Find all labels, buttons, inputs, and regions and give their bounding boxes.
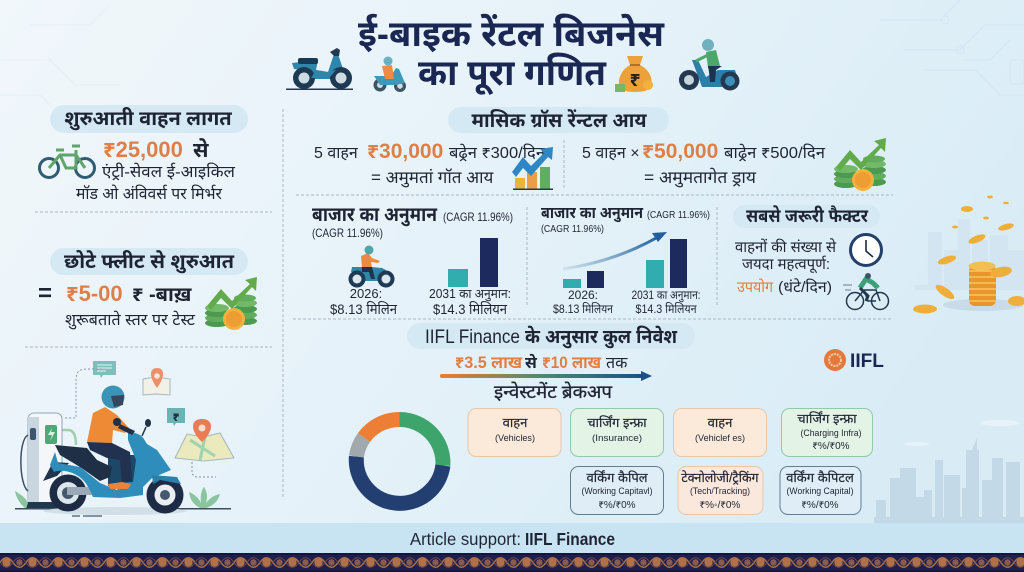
panel: most important factor bbox=[733, 205, 888, 310]
investment range: ₹10 लाख bbox=[542, 353, 602, 372]
heading: market estimate bbox=[541, 205, 710, 235]
labels: $14.3 मिलियन bbox=[636, 301, 697, 316]
footer band: IIFL Finance bbox=[525, 529, 615, 549]
heading: total investment: के अनुसार कुल निवेश bbox=[525, 325, 678, 349]
bar chart bbox=[448, 238, 498, 287]
heading: market estimate bbox=[312, 204, 513, 240]
investment range: तक bbox=[606, 355, 628, 372]
income scenario high: ₹50,000 bbox=[642, 140, 718, 163]
heading: market estimate: (CAGR 11.96%) bbox=[647, 209, 710, 221]
icon: scooter with rider bbox=[679, 39, 740, 90]
investment range: से bbox=[525, 353, 538, 372]
cost description: मॉड ओ अंविवर्स पर मिर्भर bbox=[76, 184, 222, 203]
card: vehicles: (Vehicles) bbox=[495, 433, 535, 444]
card: working capital second: ₹%/₹0% bbox=[801, 500, 839, 511]
labels: $8.13 मिलियन bbox=[553, 301, 613, 316]
panel: total investment bbox=[356, 323, 872, 514]
card: working capital: ₹%/₹0% bbox=[598, 500, 636, 511]
donut chart bbox=[356, 419, 443, 503]
labels: 2031 का अनुमान: bbox=[632, 288, 700, 303]
icon: rider on scooter bbox=[348, 246, 394, 288]
heading: market estimate: (CAGR 11.96%) bbox=[312, 226, 383, 240]
illustration: rider charging an electric scooter bbox=[15, 361, 234, 516]
labels bbox=[553, 288, 700, 316]
card: charging infra bbox=[782, 408, 872, 456]
heading: market estimate: बाजार का अनुमान bbox=[541, 205, 644, 223]
heading: important factor: सबसे जरूरी फैक्टर bbox=[746, 205, 869, 226]
bar chart bbox=[563, 239, 687, 288]
card: technology tracking bbox=[678, 466, 763, 514]
fleet amount: ₹5-00 bbox=[66, 281, 123, 306]
card: working capital: वर्किंग कैपिल bbox=[586, 470, 648, 485]
factor text: वाहनों की संख्या से bbox=[735, 238, 837, 256]
factor text: (धंटे/दिन) bbox=[778, 278, 832, 296]
labels: $8.13 मिलिन bbox=[330, 301, 397, 317]
card: charging insurance: (Insurance) bbox=[592, 433, 642, 444]
cost description: एंट्री-सेवल ई-आइकिल bbox=[102, 162, 236, 181]
icon: money bag bbox=[615, 56, 653, 92]
heading: market estimate: (CAGR 11.96%) bbox=[443, 210, 513, 224]
card: technology tracking: (Tech/Tracking) bbox=[690, 486, 750, 497]
income scenario low: बढ्रेन ₹300/दिन bbox=[449, 143, 546, 162]
flying coins bbox=[913, 196, 1024, 314]
title: का पूरा गणित bbox=[418, 52, 607, 95]
fleet description: शुरूबताते स्तर पर टेस्ट bbox=[65, 310, 196, 330]
card: working capital second: (Working Capital) bbox=[786, 486, 854, 497]
footer band: Article support: bbox=[410, 529, 521, 549]
cost description bbox=[76, 162, 236, 203]
map icons and bubbles: ₹ bbox=[173, 410, 180, 424]
labels: 2031 का अनुमान: bbox=[429, 286, 511, 302]
panel: market estimate right bbox=[541, 205, 710, 316]
scooter body bbox=[50, 430, 181, 498]
card: charging insurance bbox=[570, 408, 664, 456]
heading: market estimate: (CAGR 11.96%) bbox=[541, 223, 604, 235]
icon: parked scooter bbox=[286, 48, 353, 90]
cost amount: ₹25,000 bbox=[103, 137, 183, 162]
card: working capital second: वर्किंग कैपिटल bbox=[786, 470, 854, 485]
rider helmet bbox=[102, 386, 124, 408]
fleet amount: ₹ -बाख़ bbox=[132, 284, 192, 306]
ornamental border bbox=[0, 553, 1024, 572]
card: vehicles: वाहन bbox=[503, 415, 528, 430]
charging station bbox=[21, 413, 76, 509]
card: vehicles bbox=[468, 408, 561, 456]
card: technology tracking: ₹%◦/₹0% bbox=[700, 500, 740, 511]
factor text bbox=[735, 238, 837, 296]
heading: small fleet: छोटे फ्लीट से शुरुआत bbox=[64, 249, 235, 274]
scooter wheels bbox=[50, 474, 184, 514]
income scenario low bbox=[314, 140, 546, 189]
footer band bbox=[0, 523, 1024, 554]
labels: 2026: bbox=[350, 286, 382, 301]
icon: small scooter rider bbox=[374, 56, 406, 92]
heading: monthly income: मासिक ग्रॉस रेंन्टल आय bbox=[472, 108, 647, 132]
factor text: जयदा महत्वपूर्ण: bbox=[742, 255, 830, 274]
income scenario high: = अमुमतागेत ड्राय bbox=[644, 166, 757, 189]
heading: total investment: IIFL Finance bbox=[425, 327, 520, 348]
card: vehicles second: वाहन bbox=[708, 415, 733, 430]
icon: cyclist bbox=[843, 273, 888, 310]
card: vehicles second bbox=[674, 408, 766, 456]
heading: monthly income bbox=[448, 107, 669, 133]
icon: IIFL logo: IIFL bbox=[850, 351, 884, 372]
income scenario high: 5 वाहन × bbox=[582, 145, 640, 162]
labels: 2026: bbox=[568, 288, 598, 302]
icon: money growth bbox=[205, 277, 257, 330]
card: charging insurance: चार्जिंग इन्फ्रा bbox=[587, 415, 647, 430]
fleet amount: = bbox=[38, 280, 52, 307]
card: charging infra: चार्जिंग इन्फ्रा bbox=[797, 411, 857, 426]
faint city skyline bbox=[915, 219, 1024, 290]
panel: market estimate left bbox=[312, 204, 513, 317]
card: working capital second bbox=[780, 466, 861, 514]
heading: market estimate: बाजार का अनुमान bbox=[312, 204, 438, 227]
labels bbox=[330, 286, 511, 317]
card: charging infra: (Charging Infra) bbox=[800, 428, 862, 439]
title: ई-बाइक रेंटल बिजनेस bbox=[358, 12, 665, 54]
icon: clock bbox=[850, 234, 882, 266]
heading: small fleet bbox=[50, 248, 248, 275]
labels: $14.3 मिलियन bbox=[433, 301, 507, 317]
card: vehicles second: (Vehiclef es) bbox=[695, 433, 745, 444]
illustration: coin stack with city bbox=[913, 196, 1024, 314]
income scenario high bbox=[582, 140, 826, 189]
card: charging infra: ₹%/₹0% bbox=[812, 441, 850, 452]
icon: money growth bbox=[834, 138, 886, 191]
card: working capital: (Working Capitavl) bbox=[582, 486, 652, 497]
panel: start with small fleet bbox=[38, 248, 257, 330]
icon: growth chart bbox=[512, 147, 553, 190]
income scenario high: बाढ्रेन ₹500/दिन bbox=[724, 143, 826, 162]
title bbox=[358, 12, 665, 95]
fleet amount bbox=[38, 280, 192, 307]
investment range: ₹3.5 लाख bbox=[455, 353, 523, 372]
rider lower body bbox=[87, 442, 132, 489]
income scenario low: 5 वाहन bbox=[314, 145, 359, 162]
rider upper body bbox=[87, 407, 129, 443]
factor text: उपयोग bbox=[737, 279, 774, 296]
arrow: growth bbox=[563, 232, 667, 269]
heading: total investment bbox=[407, 323, 695, 349]
income scenario low: ₹30,000 bbox=[367, 140, 443, 163]
icon: IIFL logo bbox=[824, 349, 884, 372]
coin stack bbox=[943, 262, 1023, 311]
income scenario low: = अमुमतां गॉत आय bbox=[371, 167, 495, 189]
heading: investment breakup: इन्वेस्टमेंट ब्रेकअप bbox=[494, 381, 613, 402]
illustration: bottom city skyline bbox=[874, 420, 1024, 523]
heading: starting vehicle cost: शुरुआती वाहन लागत bbox=[64, 106, 232, 131]
plants and ground bbox=[15, 487, 231, 516]
cost amount: से bbox=[193, 138, 209, 162]
heading: starting vehicle cost bbox=[50, 105, 248, 133]
scooter rear tail bbox=[43, 462, 69, 481]
panel: starting vehicle cost bbox=[40, 105, 248, 203]
scooter seat bbox=[55, 445, 112, 481]
arrow: investment range bbox=[440, 371, 652, 381]
icon: e-cycle bbox=[40, 146, 94, 178]
map icons and bubbles bbox=[64, 361, 234, 477]
card: working capital bbox=[570, 466, 664, 514]
investment range bbox=[455, 353, 628, 372]
scooter handlebar and mirror bbox=[113, 418, 151, 436]
icon: money bag: ₹ bbox=[630, 70, 640, 91]
panel: monthly gross rental income bbox=[314, 107, 886, 191]
card: technology tracking: टेक्नोलोजी/ट्रैकिंग bbox=[681, 470, 760, 485]
